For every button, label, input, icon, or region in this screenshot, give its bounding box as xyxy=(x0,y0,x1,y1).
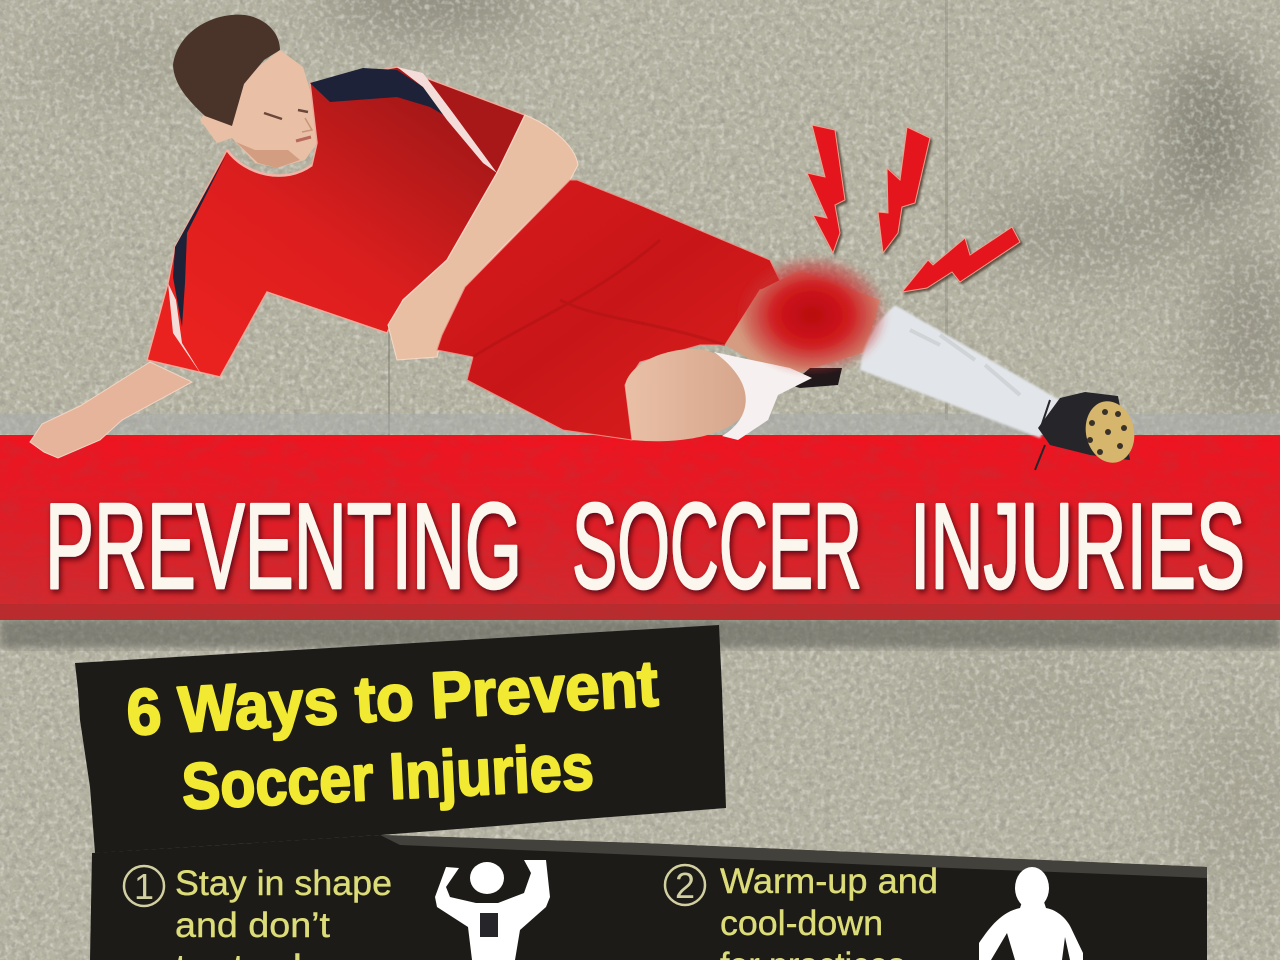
panel: heading xyxy=(75,625,726,853)
step 1 xyxy=(124,860,550,960)
title: PREVENTING xyxy=(45,478,522,614)
number badge 2 xyxy=(665,865,705,906)
step 1 text: and don’t xyxy=(175,906,330,945)
near arm xyxy=(388,115,578,360)
heading text: 6 Ways to Prevent xyxy=(125,646,660,749)
red title band xyxy=(0,435,1280,648)
icon: left bolt xyxy=(807,125,845,253)
step 1 text xyxy=(175,864,392,960)
step 2 text: cool-down xyxy=(720,904,883,943)
icon: middle bolt xyxy=(878,127,930,253)
heading text: Soccer Injuries xyxy=(180,730,595,823)
player figure xyxy=(30,15,1140,470)
number badge 2: 2 xyxy=(675,865,695,906)
step 1 text: Stay in shape xyxy=(175,864,392,903)
step 2 text xyxy=(720,862,938,960)
heading text xyxy=(125,646,660,823)
number badge 1: 1 xyxy=(134,866,154,907)
head xyxy=(173,15,317,168)
near knee xyxy=(625,349,747,441)
boot xyxy=(1035,392,1140,470)
far arm and hand xyxy=(30,362,192,458)
knee pain glow xyxy=(736,255,888,375)
red jersey xyxy=(147,67,525,377)
icon: lightning bolts xyxy=(807,125,1020,292)
step 2 xyxy=(665,862,1083,960)
panel: steps xyxy=(90,835,1207,960)
icon: standing player silhouette xyxy=(979,867,1083,960)
red shorts xyxy=(437,180,782,440)
white knee wrap xyxy=(714,352,812,440)
icon: right bolt xyxy=(902,227,1020,292)
bent lower leg xyxy=(725,270,880,372)
title xyxy=(45,478,1245,614)
icon: flexing player silhouette xyxy=(435,860,550,960)
number badge 1 xyxy=(124,866,164,907)
title: SOCCER xyxy=(572,478,862,614)
white shin sock xyxy=(860,305,1060,438)
step 2 text: Warm-up and xyxy=(720,862,938,901)
far shoe under knee xyxy=(790,368,842,388)
